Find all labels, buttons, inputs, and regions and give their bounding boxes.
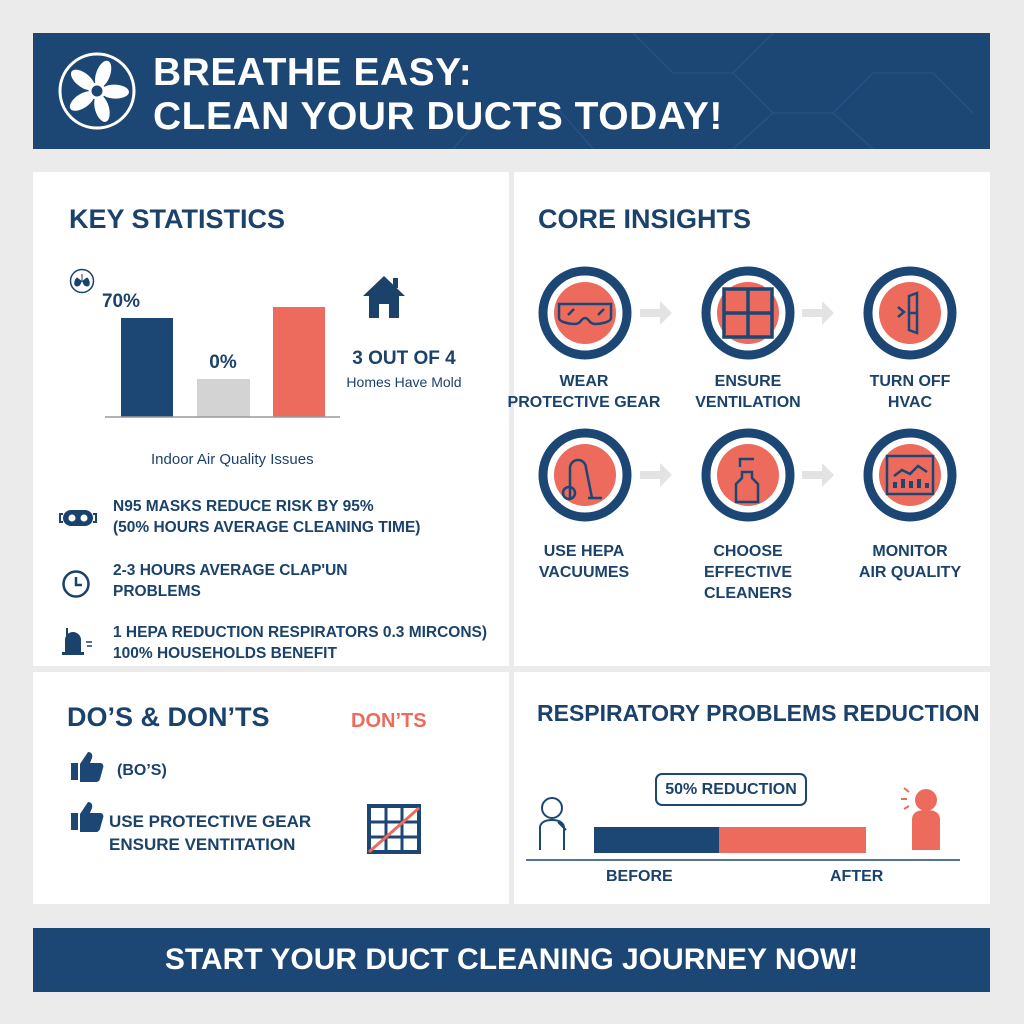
bar chart <box>102 291 340 418</box>
panel: key statistics: PROBLEMS <box>113 583 201 600</box>
panel: key statistics <box>33 172 509 666</box>
bar chart: 70% <box>102 291 140 312</box>
panel: core insights <box>514 172 990 666</box>
labels <box>508 373 660 411</box>
bar chart: 0% <box>209 352 237 373</box>
heading: CORE INSIGHTS <box>538 204 751 234</box>
panel: key statistics: 2-3 HOURS AVERAGE CLAP'UN <box>113 562 348 579</box>
icon: fan <box>58 52 136 130</box>
panel: key statistics: N95 MASKS REDUCE RISK BY 95% <box>113 498 374 515</box>
callout: 50% REDUCTION <box>665 781 797 798</box>
title: CLEAN YOUR DUCTS TODAY! <box>153 95 723 138</box>
footer banner <box>33 928 990 992</box>
icon: crossed window <box>367 804 421 854</box>
header banner <box>33 33 990 149</box>
title: BREATHE EASY: <box>153 51 472 94</box>
panel: respiratory: AFTER <box>830 868 883 885</box>
panel: key statistics: 100% HOUSEHOLDS BENEFIT <box>113 645 337 662</box>
panel: dos and donts <box>33 672 509 904</box>
panel: dos and donts: (BO’S) <box>117 762 167 779</box>
panel: respiratory <box>514 672 990 904</box>
panel: key statistics: (50% HOURS AVERAGE CLEANING TIME) <box>113 519 420 536</box>
panel: core insights: AIR QUALITY <box>859 564 961 581</box>
list: facts <box>59 498 487 662</box>
stat: 3 out of 4: 3 OUT OF 4 <box>352 348 456 369</box>
callout <box>655 773 807 806</box>
donts label: DON’TS <box>351 710 427 732</box>
panel: core insights: USE HEPA <box>544 543 624 560</box>
panel: core insights: CLEANERS <box>704 585 792 602</box>
panel: dos and donts: ENSURE VENTITATION <box>109 835 295 854</box>
comparison bar <box>526 787 960 861</box>
panel: key statistics: 1 HEPA REDUCTION RESPIRATORS 0.3 MIRCONS) <box>113 624 487 641</box>
panel: core insights: VENTILATION <box>695 394 801 411</box>
stat: 3 out of 4: Homes Have Mold <box>346 374 462 390</box>
heading: KEY STATISTICS <box>69 204 285 234</box>
labels: PROTECTIVE GEAR <box>508 394 660 411</box>
panel: core insights: MONITOR <box>872 543 948 560</box>
footer banner: START YOUR DUCT CLEANING JOURNEY NOW! <box>165 943 858 976</box>
panel: core insights: VACUUMES <box>539 564 629 581</box>
panel: respiratory: BEFORE <box>606 868 673 885</box>
insight grid <box>538 266 956 522</box>
stat: 3 out of 4 <box>346 348 462 390</box>
thumbs up icons and list <box>71 752 104 832</box>
panel: core insights: HVAC <box>888 394 932 411</box>
panel: core insights: ENSURE <box>715 373 781 390</box>
icon: lungs <box>70 268 94 294</box>
panel: core insights: TURN OFF <box>870 373 950 390</box>
panel: dos and donts: USE PROTECTIVE GEAR <box>109 812 311 831</box>
panel: core insights: CHOOSE <box>713 543 783 560</box>
labels: WEAR <box>560 373 608 390</box>
chart label: Indoor Air Quality Issues <box>151 451 314 468</box>
title <box>153 51 723 138</box>
icon: house <box>363 276 405 318</box>
heading: DO’S & DON’TS <box>67 702 270 732</box>
heading: RESPIRATORY PROBLEMS REDUCTION <box>537 700 980 726</box>
panel: core insights: EFFECTIVE <box>704 564 792 581</box>
